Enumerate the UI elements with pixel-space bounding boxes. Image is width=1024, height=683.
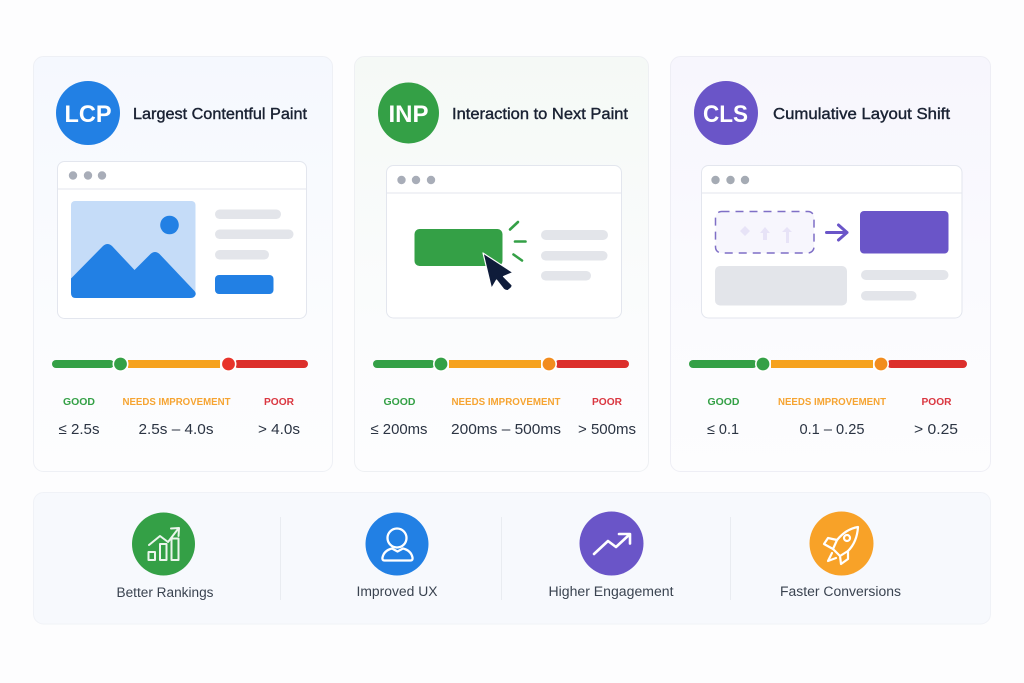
browser mockup: CLS bbox=[702, 166, 962, 318]
thresholds: CLS: NEEDS IMPROVEMENT bbox=[778, 396, 887, 408]
thresholds: INP: GOOD bbox=[384, 396, 416, 408]
LCP heading: Largest Contentful Paint bbox=[133, 106, 308, 123]
CLS badge: CLS bbox=[703, 101, 748, 128]
INP badge: INP bbox=[388, 101, 428, 128]
thresholds: LCP: GOOD bbox=[63, 396, 95, 408]
thresholds: CLS: > 0.25 bbox=[914, 421, 958, 438]
benefit: higher engagement: Higher Engagement bbox=[548, 584, 674, 599]
INP badge bbox=[378, 82, 439, 144]
benefit: better rankings bbox=[116, 512, 214, 600]
thresholds: CLS bbox=[707, 396, 958, 438]
shifted box bbox=[860, 211, 948, 254]
panel: benefits bbox=[34, 492, 990, 624]
shift arrow bbox=[826, 225, 847, 240]
LCP badge bbox=[56, 81, 120, 145]
thresholds: LCP: POOR bbox=[264, 396, 294, 408]
thresholds: CLS: ≤ 0.1 bbox=[707, 421, 739, 438]
INP heading: Interaction to Next Paint bbox=[452, 106, 629, 123]
click rays bbox=[510, 222, 526, 260]
thresholds: LCP: > 4.0s bbox=[258, 421, 300, 438]
thresholds: INP: 200ms – 500ms bbox=[451, 421, 561, 438]
image placeholder bbox=[71, 201, 196, 298]
LCP badge: LCP bbox=[64, 101, 112, 128]
thresholds: LCP: NEEDS IMPROVEMENT bbox=[122, 396, 231, 408]
thresholds: INP: > 500ms bbox=[578, 421, 636, 438]
thresholds: INP: NEEDS IMPROVEMENT bbox=[452, 396, 561, 408]
thresholds: LCP: ≤ 2.5s bbox=[58, 421, 100, 438]
benefit: faster conversions bbox=[780, 512, 901, 599]
threshold bar: LCP bbox=[52, 357, 308, 371]
thresholds: LCP bbox=[58, 396, 300, 438]
dashed origin box bbox=[716, 212, 814, 253]
thresholds: INP bbox=[370, 396, 636, 438]
green button bbox=[414, 229, 502, 266]
panel: INP bbox=[354, 56, 648, 472]
benefit: better rankings: Better Rankings bbox=[116, 585, 214, 600]
CLS badge bbox=[694, 81, 758, 145]
thresholds: INP: POOR bbox=[592, 396, 622, 408]
thresholds: INP: ≤ 200ms bbox=[370, 421, 428, 438]
threshold bar: CLS bbox=[689, 357, 967, 371]
panel: CLS bbox=[670, 56, 990, 472]
benefit: higher engagement bbox=[548, 512, 674, 599]
thresholds: CLS: 0.1 – 0.25 bbox=[800, 421, 864, 438]
thresholds: LCP: 2.5s – 4.0s bbox=[138, 421, 214, 438]
panel: LCP bbox=[34, 56, 332, 472]
threshold bar: INP bbox=[373, 357, 629, 371]
browser mockup: LCP bbox=[58, 162, 306, 318]
cursor icon bbox=[483, 253, 513, 291]
browser mockup: INP bbox=[386, 166, 622, 318]
benefit: faster conversions: Faster Conversions bbox=[780, 584, 901, 599]
benefit: improved UX bbox=[356, 512, 438, 599]
thresholds: CLS: POOR bbox=[922, 396, 952, 408]
benefit: improved UX: Improved UX bbox=[356, 584, 438, 599]
CLS heading: Cumulative Layout Shift bbox=[773, 106, 951, 123]
thresholds: CLS: GOOD bbox=[708, 396, 740, 408]
